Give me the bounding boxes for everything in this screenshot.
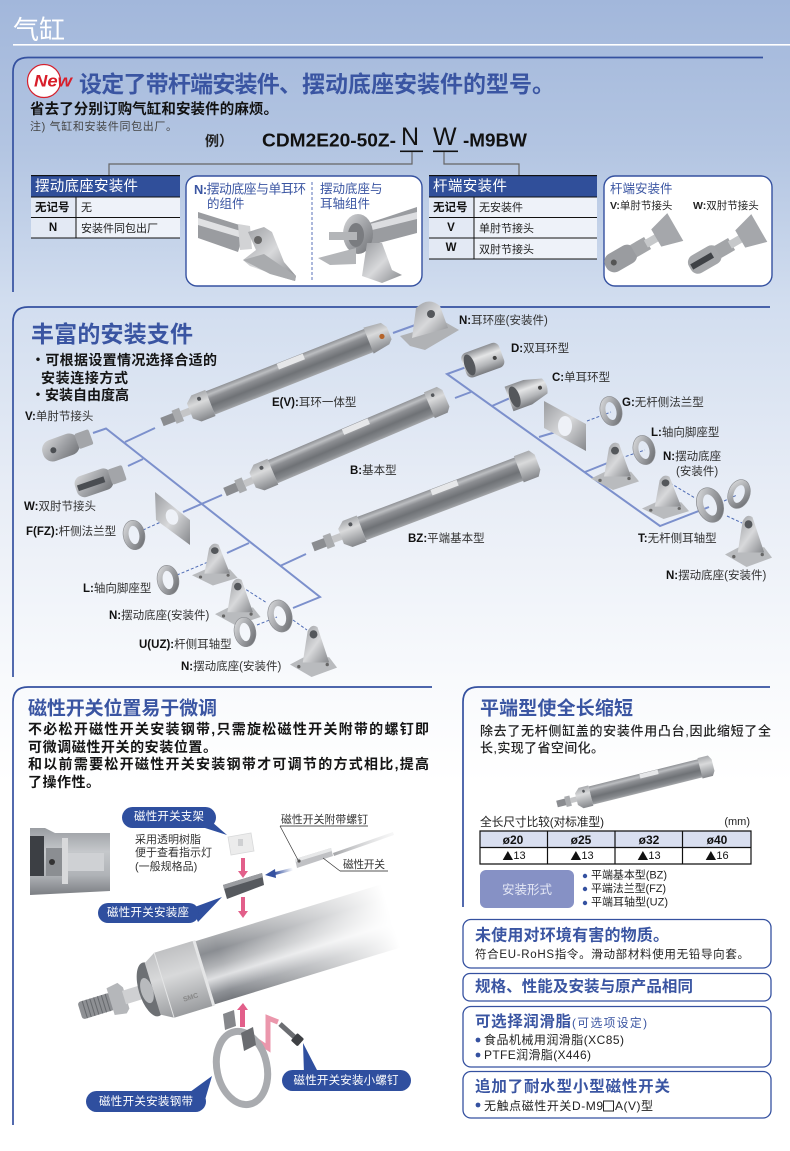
section title: 气缸 [13,15,65,45]
arrow: switch insertion [265,868,293,878]
model code example: CDM2E20-50Z- [262,130,396,150]
note: transparent resin: 便于查看指示灯 [135,845,212,859]
connector lines [109,152,519,175]
labels: D:双耳环型 [511,341,569,355]
part: switch mounting seat [223,873,264,899]
labels: BZ:平端基本型 [408,531,485,545]
bullet list: ・可根据设置情况选择合适的 [31,352,217,368]
box: water resistant switch: 追加了耐水型小型磁性开关 [475,1076,670,1096]
model code example: 例） [205,133,233,149]
labels: G:无杆侧法兰型 [622,395,704,409]
body text: 长,实现了省空间化。 [480,740,604,756]
labels: L:轴向脚座型 [83,581,151,595]
callout: steel band: 磁性开关安装钢带 [99,1094,193,1108]
labels: E(V):耳环一体型 [272,395,356,409]
labels: B:基本型 [350,463,397,477]
note: transparent resin: 采用透明树脂 [135,832,201,846]
table: length comparison: ø25 [571,833,592,847]
box: RoHS: 符合EU-RoHS指令。滑动部材料使用无铅导向套。 [475,947,749,961]
table: swing bracket: 无记号 [35,201,70,214]
photo: eye type bracket assembly [198,212,296,281]
model code example [205,123,528,152]
labels: N:摆动底座(安装件) [666,568,766,582]
part: axial foot [155,544,238,596]
list: mounting forms [583,868,668,908]
cylinder: E(V) [157,320,394,435]
label: switch [323,857,388,871]
box: RoHS [463,920,771,968]
table: length comparison [480,815,751,864]
body text: 和以前需要松开磁性开关安装钢带才可调节的方式相比,提高 [28,756,429,772]
table: swing bracket: 无 [81,202,92,214]
table: length comparison: ▲13 [637,848,661,864]
labels [24,313,766,673]
arrows: assembly [237,858,278,1048]
callout: mounting seat: 磁性开关安装座 [107,905,189,919]
badge: mounting form: 安装形式 [502,882,552,897]
note: 注) 气缸和安装件同包出厂。 [30,119,177,133]
body text [28,721,429,790]
table: rod end bracket: W [446,242,457,254]
heading: 磁性开关位置易于微调 [28,696,217,720]
callout: switch holder: 磁性开关支架 [134,809,204,823]
table: swing bracket: 安装件同包出厂 [81,221,158,235]
connector: rod side [93,428,320,630]
part: rod flange [121,492,190,551]
badge: mounting form [480,870,574,908]
connector: head side [393,324,742,526]
labels: W:双肘节接头 [24,499,96,513]
table: length comparison: ø32 [639,833,660,847]
list: mounting forms: 平端法兰型(FZ) [591,881,666,895]
part: head flange [544,394,625,451]
labels: N:摆动底座 [663,449,721,463]
callout: small screw [282,1043,411,1091]
part: magnetic switch [295,832,394,868]
table: swing bracket: 摆动底座安装件 [35,178,138,195]
labels: U(UZ):杆侧耳轴型 [139,637,232,651]
callout: steel band [86,1076,212,1112]
labels: N:耳环座(安装件) [459,313,548,327]
part: head foot [591,433,658,490]
subheading: 省去了分别订购气缸和安装件的麻烦。 [30,100,278,118]
table: length comparison: ø20 [503,833,524,847]
labels: F(FZ):杆侧法兰型 [26,524,116,538]
part: small screw [277,1020,304,1046]
cylinder: flat end [554,755,716,814]
table: length comparison: 全长尺寸比较(对标准型) [480,815,604,829]
part: eye bracket [400,301,459,350]
bullet list [31,352,217,403]
body text: 可微调磁性开关的安装位置。 [28,739,217,755]
table: length comparison: ▲13 [502,848,526,864]
panel: swing bracket options: 摆动底座与 [320,181,383,196]
table: length comparison: ▲16 [705,848,729,864]
labels: (安装件) [676,464,718,478]
heading: 平端型使全长缩短 [480,696,633,720]
box: lubricant [463,1006,771,1067]
list: mounting forms: 平端耳轴型(UZ) [591,894,668,908]
body text [480,724,771,756]
cylinder: B [220,385,451,505]
callout: switch holder [122,807,227,835]
panel: swing bracket options [186,176,422,286]
panel: swing bracket options: N:摆动底座与单耳环 [194,182,306,196]
heading: 丰富的安装支件 [31,321,193,347]
bullet list: ・安装自由度高 [31,387,129,403]
table: rod end bracket: V [447,222,455,234]
panel: rod end options: 杆端安装件 [610,181,673,196]
note: transparent resin [135,832,212,873]
model code example: W [433,123,457,151]
panel: magnetic switch adjustment [13,687,432,1125]
labels: T:无杆侧耳轴型 [638,531,717,545]
label: switch screw: 磁性开关附带螺钉 [281,812,368,826]
bullet list: 安装连接方式 [41,370,128,386]
box: lubricant: (可选项设定) [572,1016,647,1030]
box: water resistant switch: A(V)型 [615,1099,653,1113]
panel: new mounting models [13,58,772,292]
box: RoHS: 未使用对环境有害的物质。 [475,926,669,944]
heading: 摆动底座安装件的型号。 [302,71,555,97]
table: swing bracket [31,175,180,238]
table: length comparison: (mm) [724,816,750,828]
panel: flat end type [463,687,771,908]
table: rod end bracket: 无记号 [433,201,468,214]
panel: swing bracket options: 耳轴组件 [320,196,370,211]
large cylinder: SMC [182,992,199,1004]
part: switch band [210,1010,274,1109]
icon: new badge [28,64,74,98]
body text: 不必松开磁性开关安装钢带,只需旋松磁性开关附带的螺钉即 [28,721,429,737]
box: water resistant switch [463,1072,771,1118]
body text: 除去了无杆侧缸盖的安装件用凸台,因此缩短了全 [480,724,771,738]
box: lubricant: 可选择润滑脂 [475,1012,571,1030]
part: head trunnion with brackets [642,476,772,567]
labels: N:摆动底座(安装件) [109,608,209,622]
callout: small screw: 磁性开关安装小螺钉 [294,1073,399,1087]
note: transparent resin: (一般规格品) [135,859,197,873]
model code example: -M9BW [463,130,528,150]
part: switch holder [228,833,254,855]
heading [79,71,555,97]
body text: 了操作性。 [28,774,100,790]
box: same specification: 规格、性能及安装与原产品相同 [475,976,693,996]
part: double clevis [460,341,506,379]
heading: 设定了带杆端安装件、 [79,71,302,97]
box: water resistant switch: 无触点磁性开关D-M9 [484,1098,603,1113]
table: rod end bracket: 无安装件 [479,200,523,214]
panel: rod end options: W:双肘节接头 [693,199,759,212]
callout: mounting seat [98,897,222,923]
label: switch screw [280,812,368,860]
part: single clevis [505,373,551,411]
box: lubricant: PTFE润滑脂(X446) [484,1047,591,1062]
table: rod end bracket: 杆端安装件 [433,178,507,195]
model code example: N [401,123,419,151]
box: same specification [463,974,771,1001]
large cylinder [70,878,416,1046]
table: length comparison: ø40 [707,833,728,847]
label: switch: 磁性开关 [343,857,385,871]
panel: swing bracket options: 的组件 [207,196,245,211]
labels: V:单肘节接头 [25,409,93,423]
panel: mounting accessories [13,301,772,677]
table: rod end bracket [429,175,597,259]
table: rod end bracket: 单肘节接头 [479,221,534,235]
panel: rod end options: V:单肘节接头 [610,199,672,212]
cylinder: BZ [308,449,542,560]
labels: L:轴向脚座型 [651,425,719,439]
photo: single knuckle joint [598,213,683,281]
part: swing bracket and trunnion [215,579,337,677]
icon: new badge: New [34,72,74,90]
table: rod end bracket: 双肘节接头 [479,242,534,256]
part: double knuckle joint [72,462,128,499]
photo: double knuckle joint [682,214,767,282]
list: mounting forms: 平端基本型(BZ) [591,868,667,882]
part: single knuckle joint [39,426,95,464]
box: lubricant: 食品机械用润滑脂(XC85) [484,1032,624,1047]
table: swing bracket: N [49,222,57,234]
labels: C:单耳环型 [552,370,610,384]
photo: trunnion bracket assembly [318,207,417,283]
table: length comparison: ▲13 [570,848,594,864]
photo: switch close-up [30,828,110,895]
labels: N:摆动底座(安装件) [181,659,281,673]
panel: rod end options [598,176,772,286]
